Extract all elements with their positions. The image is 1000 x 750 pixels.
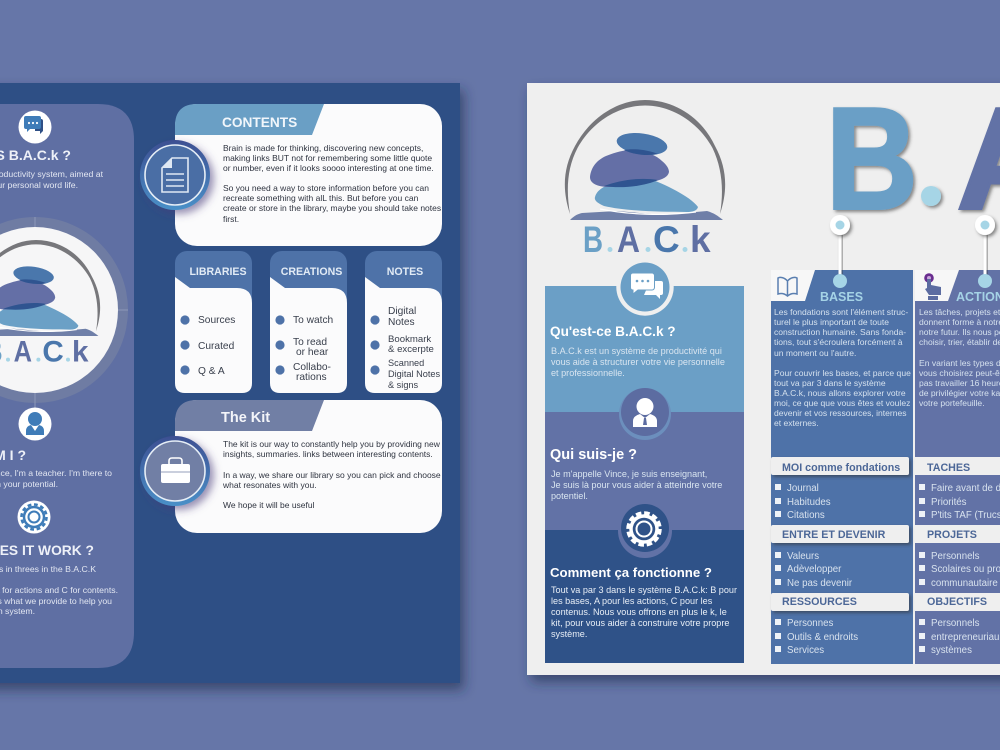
icon: person [633, 398, 657, 427]
logo: B.A.C.k stones [565, 100, 725, 261]
text: bases body: un moment ou l'autre. [774, 348, 856, 358]
text: contents body: Brain is made for thinking, discovering new concepts, [223, 143, 423, 153]
text: bases body: tions, tout s'écroulera forcément à [774, 337, 903, 347]
text: contents body: So you need a way to store information before you can [223, 183, 429, 193]
text: comment body: kit, pour vous aider à construire votre propre [551, 618, 729, 628]
text: contents body: create or store in the library, maybe you should take notes [223, 203, 441, 213]
icon: pointing hand [924, 273, 941, 300]
icon: chat bubbles [630, 273, 663, 299]
panel: Qui suis-je: Qui suis-je ? [550, 447, 637, 463]
text: bases body: construction humaine. Sans fonda- [774, 327, 906, 337]
panel: creations card: To read [293, 337, 327, 348]
text: bases body: moi, ce que que vous êtes et voulez [774, 398, 910, 408]
header: the kit: The Kit [221, 410, 270, 426]
list: RESSOURCES: Services [787, 645, 824, 656]
panel: creations card: To watch [293, 315, 333, 326]
text: actions body: choisir, trier, établir de [919, 337, 1000, 347]
list: TACHES: Faire avant de d [931, 483, 1000, 494]
panel: notes card: Digital Notes [388, 369, 440, 379]
text: qui suis-je body [551, 469, 722, 501]
text: quest-ce body: et professionnelle. [551, 368, 625, 378]
panel: notes card: NOTES [387, 266, 423, 278]
text: bases body: Les fondations sont l'élément struc- [774, 307, 908, 317]
list: MOI comme fondations: Journal [787, 483, 819, 494]
text: bases body: devenir et vos ressources, internes [774, 408, 907, 418]
text: comment body: contenus. Nous vous offrons en plus le k, le [551, 607, 727, 617]
list: OBJECTIFS [915, 593, 1000, 656]
list: PROJETS: Personnels [931, 551, 980, 562]
panel: notes card: Notes [388, 317, 415, 328]
icon: gear [628, 513, 660, 545]
text: bases body: et externes. [774, 418, 819, 428]
text: comment body: Tout va par 3 dans le système B.A.C.k: B pour [551, 585, 737, 595]
list: OBJECTIFS: systèmes [931, 645, 972, 656]
panel: notes card: & signs [388, 380, 419, 390]
list: ENTRE ET DEVENIR: Valeurs [787, 551, 819, 562]
panel: libraries card: Curated [198, 341, 235, 352]
list: RESSOURCES [771, 593, 909, 656]
text: kit body: what resonates with you. [222, 480, 317, 490]
logo: circular badge [0, 217, 128, 412]
text: kit body: The kit is our way to constantly help you by providing new [223, 439, 441, 449]
panel: notes card: Bookmark [388, 334, 431, 345]
list: ENTRE ET DEVENIR: Adèvelopper [787, 564, 842, 575]
logo: B.A.C.k stones: B [583, 218, 603, 260]
list: PROJETS: communautaire [931, 578, 998, 589]
panel: creations card: rations [296, 372, 327, 383]
panel: Qu'est-ce B.A.C.k: Qu'est-ce B.A.C.k ? [550, 324, 676, 339]
list: ENTRE ET DEVENIR: Ne pas devenir [787, 578, 853, 589]
panel: the kit card [140, 400, 442, 533]
text: actions body: votre portefeuille. [919, 398, 985, 408]
list: MOI comme fondations: MOI comme fondations [782, 462, 900, 474]
panel: libraries card: Sources [198, 315, 235, 326]
text: actions body: vous choisirez peut-êt [919, 368, 1000, 378]
list: RESSOURCES: RESSOURCES [782, 596, 857, 608]
text: kit body: insights, summaries. links between interesting contents. [223, 449, 433, 459]
text: contents body: making links BUT not for remembering some little quote [223, 153, 432, 163]
text: actions body: Les tâches, projets et [919, 307, 1000, 317]
text: comment body [551, 585, 737, 639]
panel: intro sidebar [0, 104, 134, 668]
list: TACHES: Priorités [931, 497, 967, 508]
text: qui suis-je body: potentiel. [551, 491, 588, 501]
icon: document [140, 140, 210, 210]
logo: circular badge: A [14, 335, 32, 368]
panel: notes card: & excerpte [388, 344, 434, 355]
logo: B.A.C.k stones: k [690, 219, 711, 260]
text: actions body: En variant les types d' [919, 358, 1000, 368]
column: BASES: BASES [820, 290, 863, 304]
icon: gear badge [18, 500, 50, 534]
text: contents body: recreate something with alL this. But before you can [223, 193, 419, 203]
text: comment body: système. [551, 629, 587, 639]
text: kit body [222, 439, 441, 510]
panel: creations card: Collabo- [293, 362, 331, 373]
list: OBJECTIFS: entrepreneuriau [931, 632, 999, 643]
panel: English dark page [0, 83, 460, 683]
text: contents body [223, 143, 441, 224]
panel: Qu'est-ce B.A.C.k [545, 258, 744, 412]
text: bases body [774, 307, 911, 428]
icon: chat badge [18, 110, 52, 144]
column: BASES [771, 270, 913, 664]
panel: libraries card: Q & A [198, 366, 225, 377]
list: PROJETS: Scolaires ou pro [931, 564, 1000, 575]
list: TACHES [915, 457, 1000, 521]
text: quest-ce body [551, 346, 725, 378]
panel: creations card: CREATIONS [281, 266, 342, 278]
text: qui suis-je body: Je suis là pour vous aider à atteindre votre [551, 480, 722, 490]
connector pin: ACTIONS [975, 215, 995, 288]
list: OBJECTIFS: OBJECTIFS [927, 596, 987, 608]
panel: Comment ça fonctionne [545, 504, 744, 663]
logo: B.A.C.k stones: A [617, 220, 640, 261]
panel: creations card: or hear [296, 347, 329, 358]
header: contents: CONTENTS [222, 115, 297, 130]
icon: briefcase [140, 436, 210, 506]
panel: French page [527, 78, 1000, 675]
panel: contents card [140, 104, 442, 246]
text: bases body: B.A.C.k, nous allons explorer votre [774, 388, 906, 398]
text: how it works body [0, 564, 118, 616]
list: TACHES: P'tits TAF (Trucs [931, 510, 1000, 521]
big letters B.A: B [826, 78, 918, 239]
panel: notes card: Digital [388, 306, 416, 317]
panel: Qui suis-je [545, 388, 744, 530]
icon: open book [778, 277, 797, 296]
header: the kit [175, 400, 324, 431]
text: bases body: tout va par 3 dans le système [774, 378, 886, 388]
text: who am I body [0, 468, 112, 489]
list: ENTRE ET DEVENIR [771, 525, 909, 589]
column: ACTIONS [915, 270, 1000, 664]
header: contents [175, 104, 324, 135]
text: kit body: We hope it will be useful [223, 500, 315, 510]
list: RESSOURCES: Outils & endroits [787, 632, 858, 643]
text: bases body: turel le plus important de toute [774, 317, 889, 327]
text: bases body: Pour couvrir les bases, et parce que [774, 368, 911, 378]
list: ENTRE ET DEVENIR: ENTRE ET DEVENIR [782, 529, 886, 541]
panel: libraries card [175, 251, 252, 393]
text: kit body: In a way, we share our library so you can pick and choose [223, 470, 441, 480]
logo: B.A.C.k stones: C [653, 219, 680, 260]
panel: notes card: Scanned [388, 358, 424, 368]
icon: person badge [18, 408, 52, 440]
text: quest-ce body: vous aide à structurer votre vie personnelle [551, 357, 725, 367]
panel: creations card [270, 251, 347, 393]
big letters B.A [826, 78, 1000, 240]
text: quest-ce body: B.A.C.k est un système de productivité qui [551, 346, 722, 356]
text: actions body [919, 307, 1000, 408]
list: RESSOURCES: Personnes [787, 618, 833, 629]
list: PROJETS: PROJETS [927, 529, 977, 541]
connector pin: BASES [830, 215, 850, 288]
panel: notes card [365, 251, 442, 393]
logo: circular badge: k [72, 336, 89, 369]
text: what is back body: oductivity system, aimed at [0, 169, 104, 179]
list: TACHES: TACHES [927, 462, 970, 474]
text: comment body: les bases, A pour les actions, C pour les [551, 596, 713, 606]
text: what is back body [0, 169, 104, 190]
list: PROJETS [915, 525, 1000, 589]
logo: circular badge: C [42, 336, 64, 369]
list: MOI comme fondations: Habitudes [787, 497, 831, 508]
list: MOI comme fondations: Citations [787, 510, 825, 521]
panel: libraries card: LIBRARIES [189, 266, 247, 278]
text: contents body: first. [223, 214, 239, 224]
panel: Comment ça fonctionne: Comment ça fonctionne ? [550, 565, 712, 580]
text: how it works body: s what we provide to help you [0, 596, 112, 606]
list: MOI comme fondations [771, 457, 909, 521]
list: OBJECTIFS: Personnels [931, 618, 980, 629]
text: contents body: or number, even if it looks soooo interesting at one time. [223, 163, 434, 173]
text: qui suis-je body: Je m'appelle Vince, je suis enseignant, [551, 469, 707, 479]
